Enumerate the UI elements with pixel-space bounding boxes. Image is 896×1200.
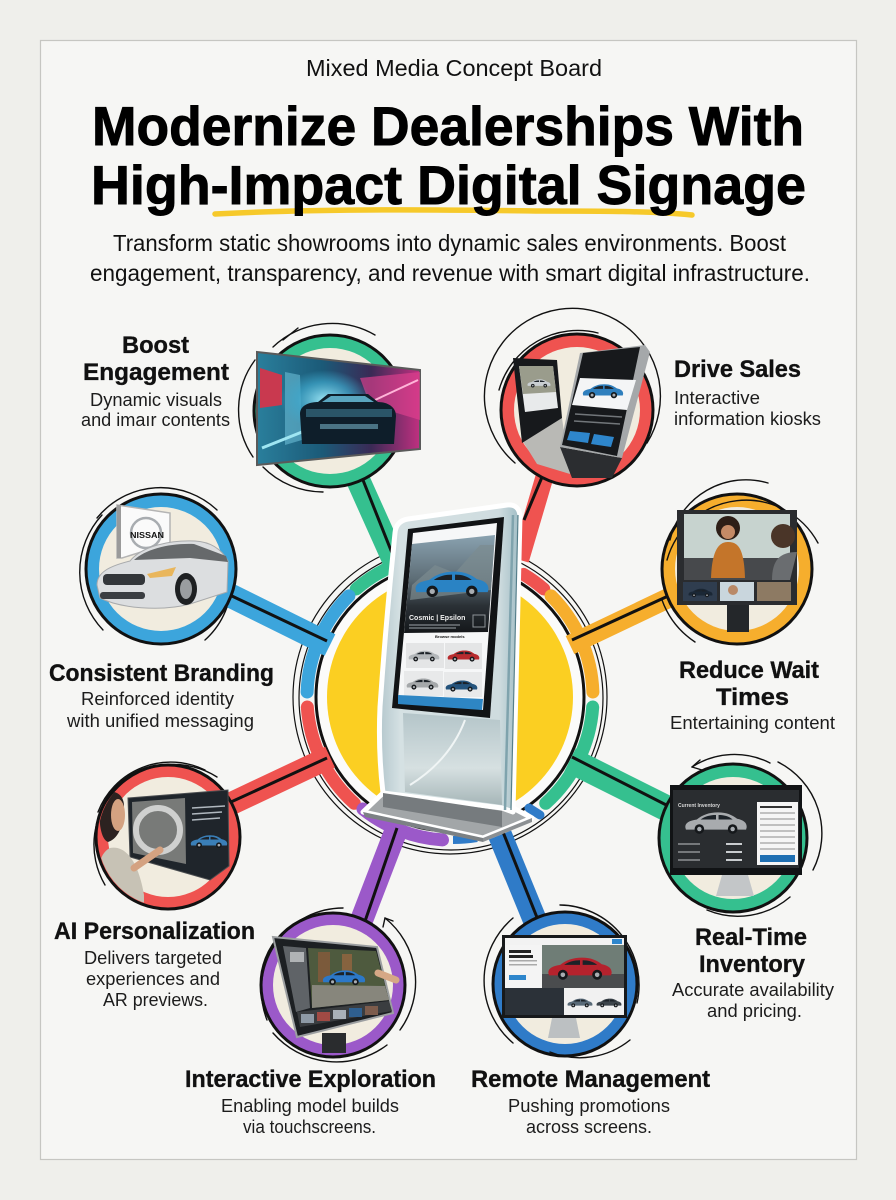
connector: boost engagement [350,460,394,589]
label: consistent branding: Consistent Branding [49,660,274,687]
central hub circle [293,540,607,854]
icon: large kiosk [560,345,650,478]
node: boost engagement [239,324,420,492]
label: drive sales: information kiosks [674,409,821,429]
label: interactive exploration: via touchscreens. [243,1117,376,1137]
label: consistent branding: with unified messaging [66,711,254,731]
label: reduce wait times: Reduce Wait [679,657,819,684]
kiosk base plate [363,793,532,842]
icon: inventory monitor [670,785,802,896]
label: consistent branding [49,660,274,731]
label: real-time inventory: Real-Time [695,924,807,951]
kiosk hero car [416,572,488,597]
label: interactive exploration [185,1066,436,1137]
connector: real-time inventory [546,707,700,825]
connector: drive sales [520,465,548,589]
title with underline: High-Impact Digital Signage [91,154,806,216]
label: real-time inventory [672,924,834,1021]
icon: touch display [128,790,229,880]
connector: consistent branding [205,583,349,692]
node: ai personalization [94,762,240,909]
label: remote management: across screens. [526,1117,652,1137]
title with underline: Modernize Dealerships With [92,95,804,157]
label: ai personalization: AR previews. [103,990,208,1010]
label: ai personalization: Delivers targeted [84,948,222,968]
icon: person touching screen [98,791,160,905]
label: remote management: Remote Management [471,1066,710,1093]
label: remote management: Pushing promotions [508,1096,670,1116]
subtitle [90,230,810,286]
icon: brand sign: NISSAN [130,531,164,540]
title with underline [91,95,806,216]
subtitle: engagement, transparency, and revenue with smart digital infrastructure. [90,260,810,286]
label: real-time inventory: Accurate availability [672,980,834,1000]
label: remote management [471,1066,710,1137]
label: drive sales: Interactive [674,388,760,408]
kiosk screen: Browse models [435,634,465,639]
subtitle: Transform static showrooms into dynamic sales environments. Boost [113,230,787,256]
center kiosk [363,505,532,842]
node: consistent branding [80,488,236,644]
icon: inventory monitor: Current Inventory [678,803,720,809]
label: reduce wait times: Times [716,684,789,711]
node: remote management [484,905,639,1058]
label: boost engagement: Boost [122,332,189,359]
node: real-time inventory [659,754,822,916]
header: kicker: Mixed Media Concept Board [306,55,602,81]
kiosk screen [392,517,504,718]
label: boost engagement [81,332,230,430]
label: reduce wait times [670,657,835,733]
icon: video wall screen [257,352,420,465]
node: drive sales [484,308,660,486]
label: real-time inventory: and pricing. [707,1001,802,1021]
kiosk screen: Cosmic | Epsilon [409,615,465,622]
label: ai personalization: AI Personalization [54,918,255,945]
label: reduce wait times: Entertaining content [670,713,835,733]
label: drive sales [674,356,821,429]
icon: touch tablet [273,937,396,1053]
connector: ai personalization [205,707,354,816]
node: interactive exploration [261,908,416,1062]
label: interactive exploration: Interactive Exploration [185,1066,436,1093]
label: ai personalization [54,918,255,1010]
icon: desktop monitor [502,935,627,1038]
icon: waiting room display [677,510,797,632]
connector: remote management [453,808,543,940]
icon: silver sedan [97,541,228,608]
label: real-time inventory: Inventory [699,951,806,978]
kiosk glass body [379,505,520,827]
label: boost engagement: Dynamic visuals [90,390,222,410]
label: consistent branding: Reinforced identity [81,689,234,709]
connector: interactive exploration [352,809,442,945]
connector: reduce wait times [551,583,700,692]
node: reduce wait times [662,480,818,644]
icon: small kiosk [513,358,570,474]
label: drive sales: Drive Sales [674,356,801,383]
label: interactive exploration: Enabling model builds [221,1096,399,1116]
icon: brand sign [117,505,170,558]
label: boost engagement: Engagement [83,359,229,386]
label: boost engagement: and imaır contents [81,410,230,430]
label: ai personalization: experiences and [86,969,220,989]
kiosk car grid [404,643,482,697]
